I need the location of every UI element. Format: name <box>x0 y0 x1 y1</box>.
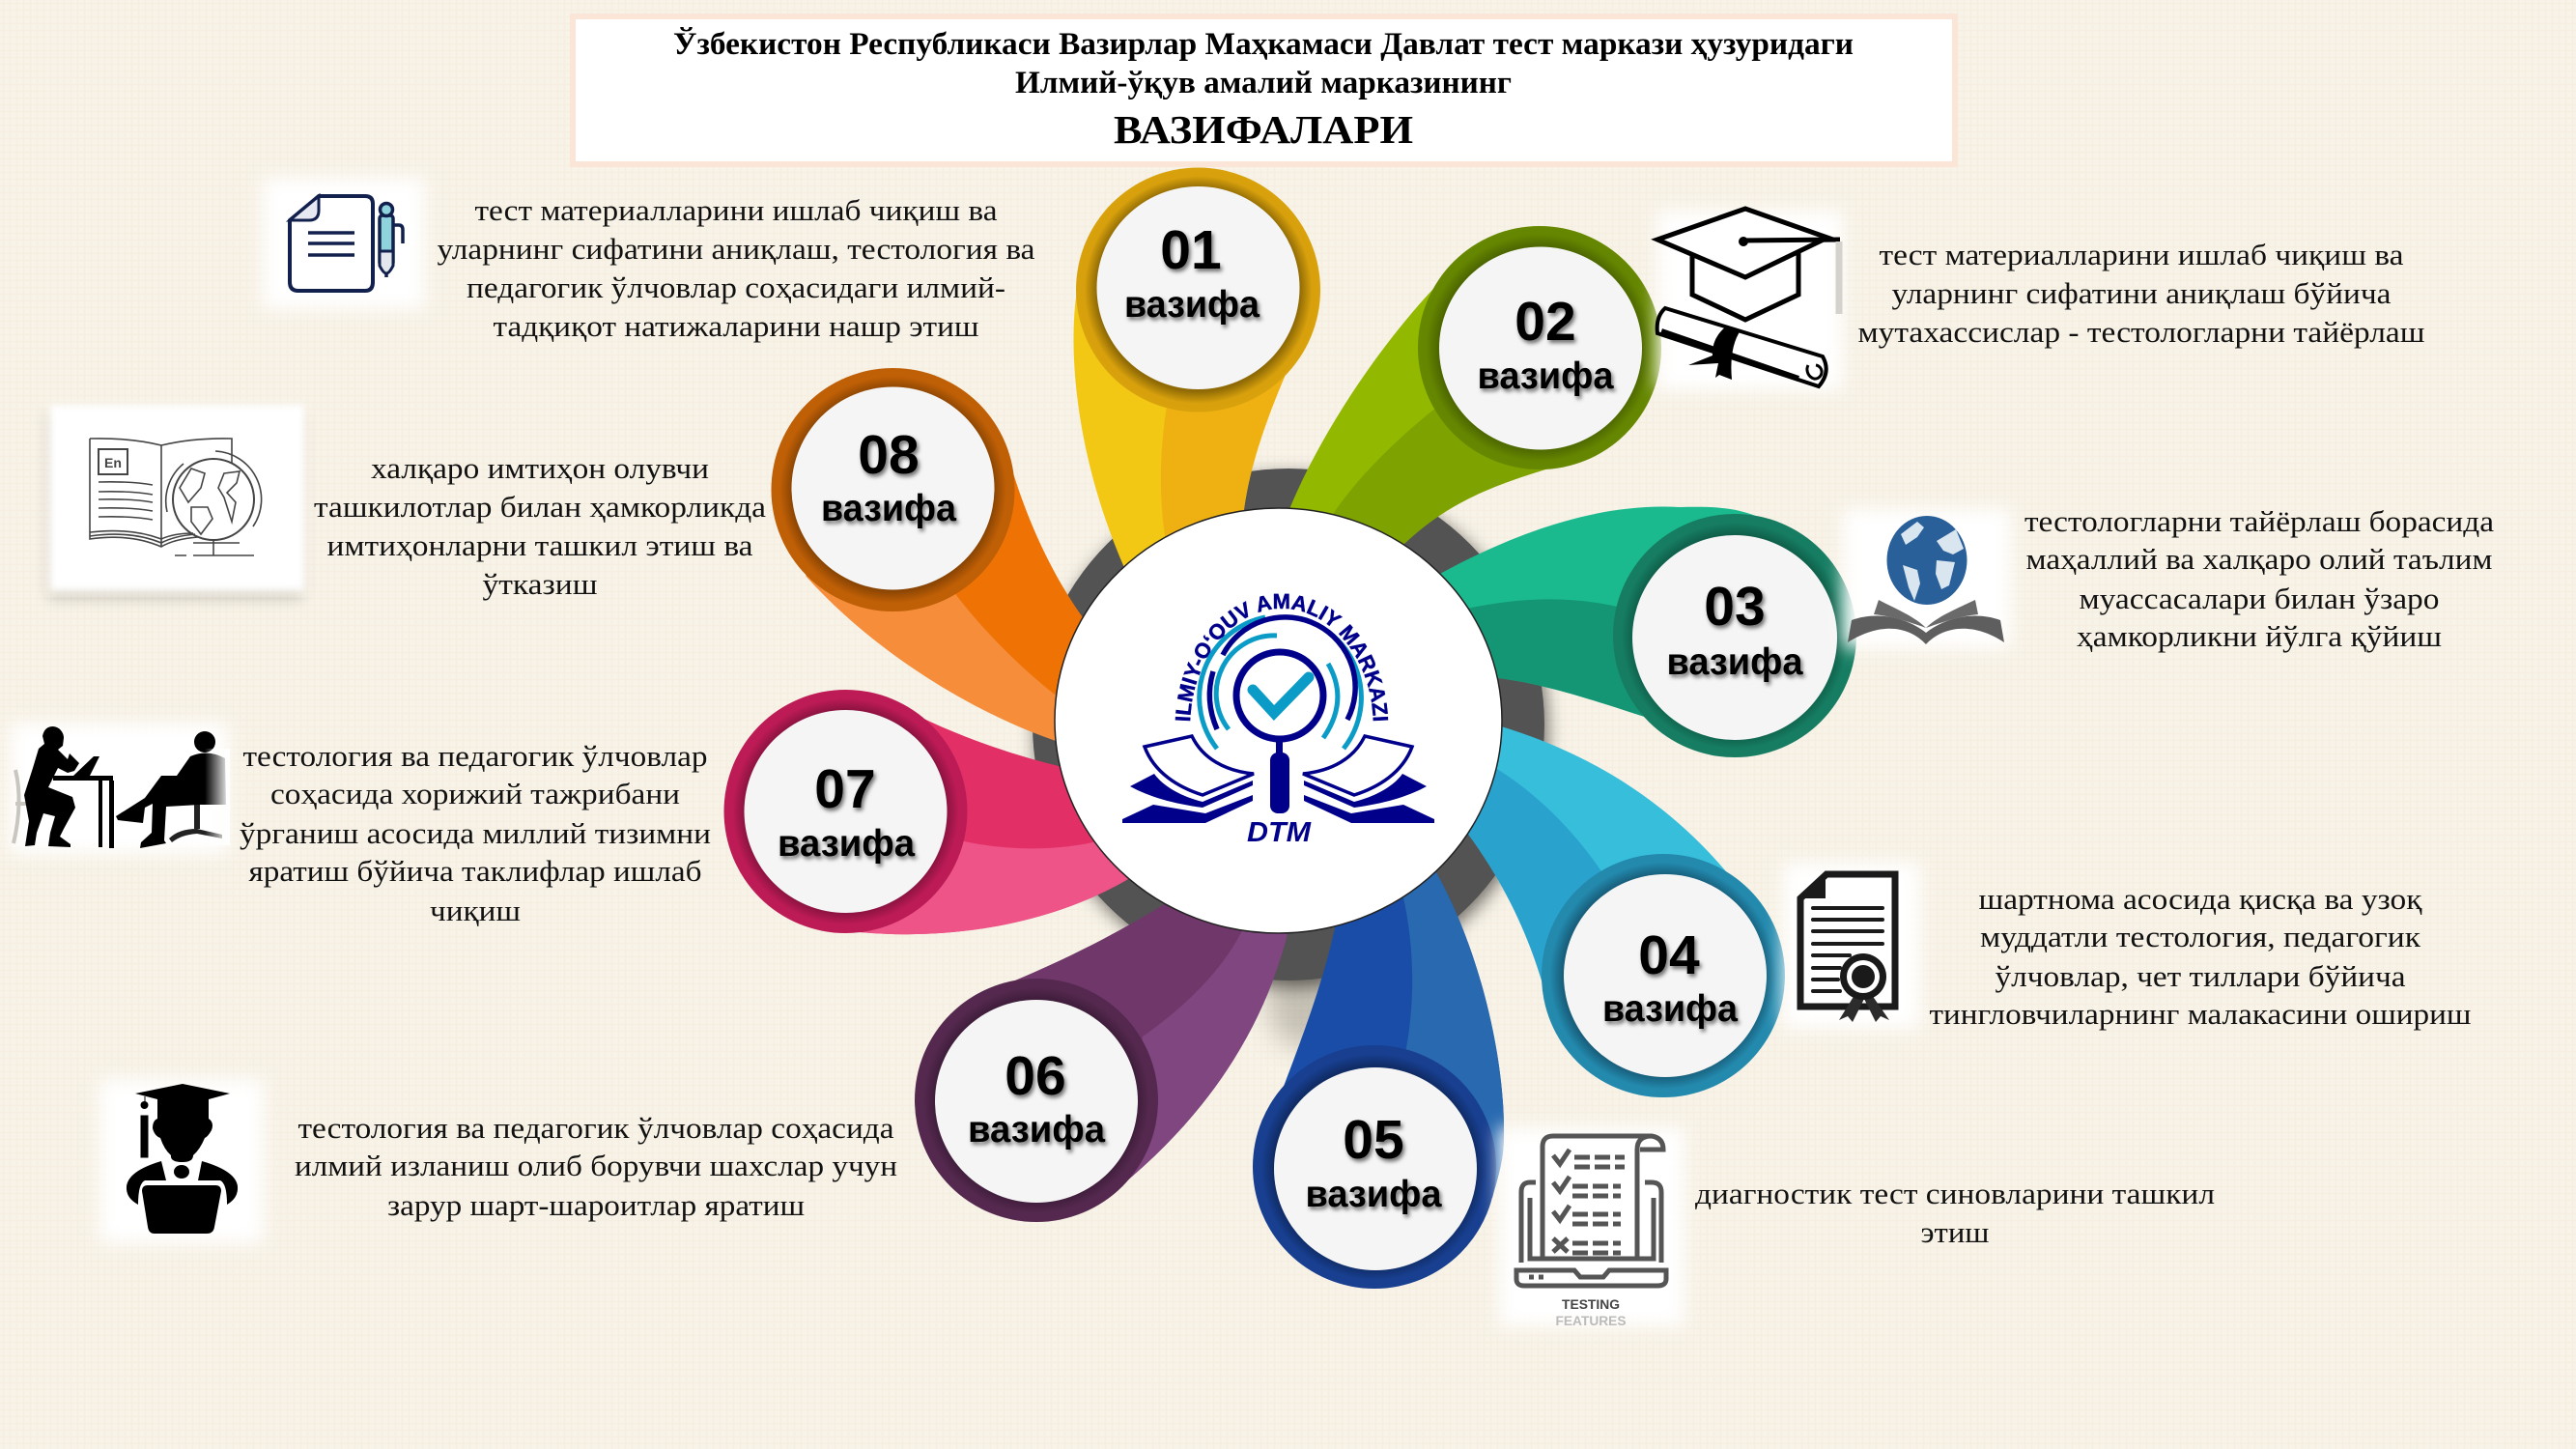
text: task 07: тестология ва педагогик ўлчовлар <box>243 739 707 773</box>
icon: document and pen <box>263 178 425 309</box>
petal 08: 08 <box>858 424 920 486</box>
logo arc text: ILMIY-O‘QUV AMALIY MARKAZI <box>1175 593 1389 721</box>
petal 06 <box>915 898 1288 1222</box>
petal 05 <box>1253 869 1504 1289</box>
petal 03 <box>1401 507 1856 757</box>
text: task 02 <box>1858 238 2425 349</box>
title line 2: Илмий-ўқув амалий марказининг <box>1015 66 1512 100</box>
title line 1: Ўзбекистон Республикаси Вазирлар Маҳкамаси Давлат тест маркази ҳузуридаги <box>673 26 1854 62</box>
logo magnifier <box>1236 652 1323 813</box>
grey hub ring <box>1033 469 1544 980</box>
petal 06: вазифа <box>968 1109 1105 1151</box>
petal 03: вазифа <box>1667 641 1803 683</box>
text: task 07: соҳасида хорижий тажрибани <box>270 777 680 810</box>
text: task 01 <box>437 193 1035 343</box>
text: task 06: тестология ва педагогик ўлчовлар соҳасида <box>297 1111 894 1145</box>
text: task 04: муддатли тестология, педагогик <box>1980 920 2421 953</box>
petal 07 <box>724 690 1159 934</box>
text: task 08 <box>314 451 766 601</box>
text: task 03: маҳаллий ва халқаро олий таълим <box>2026 542 2492 576</box>
text: task 06: зарур шарт-шароитлар яратиш <box>387 1188 805 1222</box>
logo book right <box>1303 736 1434 823</box>
text: task 02: уларнинг сифатини аниқлаш бўйича <box>1891 276 2392 310</box>
text: task 04: ўлчовлар, чет тиллари бўйича <box>1996 959 2406 993</box>
text: task 06: илмий изланиш олиб борувчи шахслар учун <box>295 1149 897 1182</box>
text: task 08: имтиҳонларни ташкил этиш ва <box>326 528 753 562</box>
text: task 03 <box>2024 504 2494 653</box>
petal 08: вазифа <box>821 488 956 529</box>
petal 03: 03 <box>1704 576 1766 638</box>
petal 02 <box>1289 226 1661 580</box>
logo book left <box>1122 736 1254 823</box>
text: task 04: шартнома асосида қисқа ва узоқ <box>1978 882 2423 916</box>
icon: book and globe <box>50 405 304 590</box>
icon: globe and open book <box>1843 509 2011 648</box>
petal 04 <box>1430 723 1785 1097</box>
text: task 08: ташкилотлар билан ҳамкорликда <box>314 490 766 524</box>
petal 06: 06 <box>1005 1045 1066 1107</box>
petal 02: вазифа <box>1478 355 1614 397</box>
text: task 01: педагогик ўлчовлар соҳасидаги илмий- <box>467 270 1005 304</box>
hub shadow <box>1267 952 1341 1048</box>
text: task 07: яратиш бўйича таклифлар ишлаб <box>249 854 701 888</box>
icon: cap and diploma <box>1657 209 1843 390</box>
icon: two people at interview <box>10 723 230 854</box>
text: task 04: тингловчиларнинг малакасини ошириш <box>1930 997 2472 1031</box>
petal 05: 05 <box>1343 1109 1404 1171</box>
petal 02: 02 <box>1514 291 1576 353</box>
text: task 02: мутахассислар - тестологларни тайёрлаш <box>1858 315 2425 349</box>
text: task 02: тест материалларини ишлаб чиқиш ва <box>1880 238 2404 271</box>
text: task 05: этиш <box>1920 1215 1990 1249</box>
text: task 08: халқаро имтиҳон олувчи <box>371 451 709 485</box>
petal 04: вазифа <box>1602 988 1738 1030</box>
title line 3: ВАЗИФАЛАРИ <box>1114 107 1413 152</box>
text: task 01: тест материалларини ишлаб чиқиш ва <box>475 193 998 227</box>
logo arcs <box>1200 617 1361 749</box>
text: task 01: тадқиқот натижаларини нашр этиш <box>493 309 979 343</box>
petal 01: вазифа <box>1124 284 1260 326</box>
TESTING label: TESTING <box>1562 1297 1620 1312</box>
icon: graduate at laptop <box>99 1079 264 1243</box>
icon: testing features <box>1499 1127 1684 1328</box>
petal 01: 01 <box>1160 219 1222 281</box>
text: task 03: муассасалари билан ўзаро <box>2079 582 2440 615</box>
FEATURES label: FEATURES <box>1555 1314 1627 1328</box>
petal 08 <box>771 368 1111 753</box>
text: task 08: ўтказиш <box>483 567 598 601</box>
logo DTM: DTM <box>1247 817 1312 848</box>
petal 05: вазифа <box>1306 1174 1442 1215</box>
En label: En <box>104 455 122 470</box>
text: task 07: чиқиш <box>430 894 521 927</box>
text: task 01: уларнинг сифатини аниқлаш, тестология ва <box>437 232 1035 266</box>
petal 04: 04 <box>1638 924 1700 986</box>
text: task 07 <box>240 739 711 927</box>
petal 07: вазифа <box>778 823 915 865</box>
text: task 05: диагностик тест синовларини ташкил <box>1695 1177 2215 1210</box>
text: task 03: ҳамкорликни йўлга қўйиш <box>2077 619 2442 653</box>
petal 07: 07 <box>814 758 876 820</box>
text: task 03: тестологларни тайёрлаш борасида <box>2024 504 2494 538</box>
text: task 07: ўрганиш асосида миллий тизимни <box>240 816 711 850</box>
text: task 05 <box>1695 1177 2215 1249</box>
centre logo <box>1054 507 1503 934</box>
icon: certificate <box>1783 863 1920 1029</box>
title panel <box>573 16 1955 164</box>
text: task 04 <box>1930 882 2472 1031</box>
text: task 06 <box>295 1111 897 1222</box>
petal 01 <box>1073 168 1320 580</box>
